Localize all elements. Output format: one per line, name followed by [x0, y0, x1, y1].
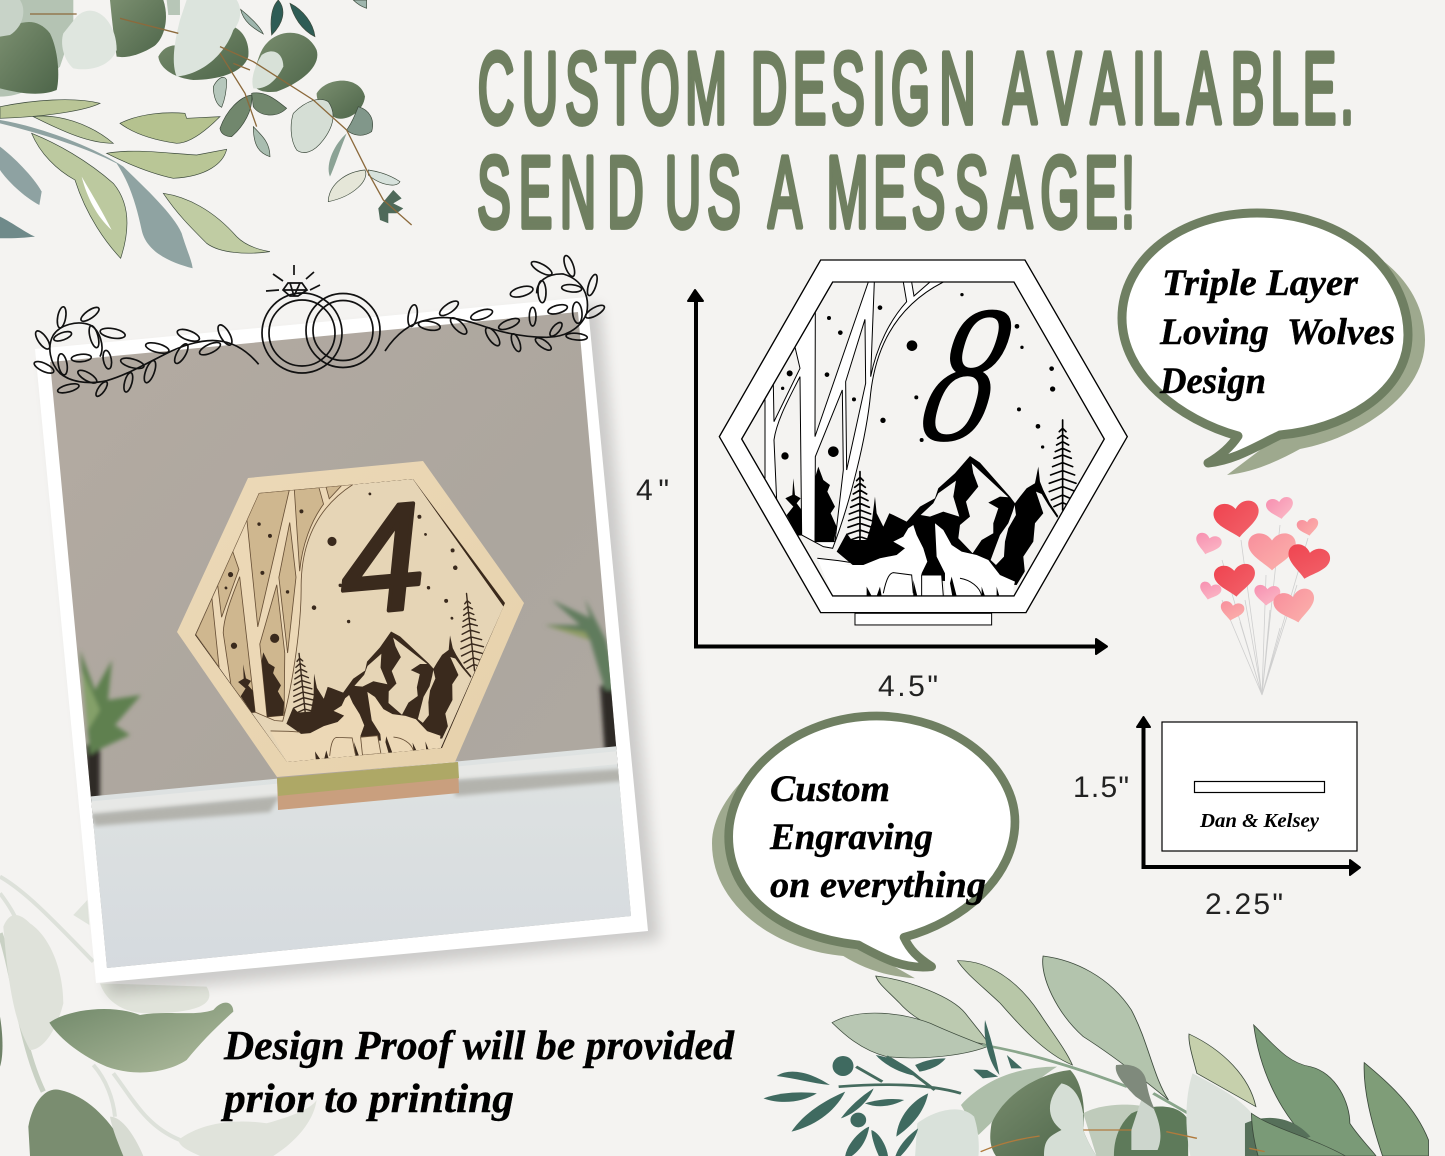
speech bubble: custom engraving: Engraving [769, 817, 933, 858]
rings [262, 293, 380, 373]
dimension axes: hexagon [688, 290, 1107, 654]
dimension label: height 4 inches: 4" [636, 474, 669, 507]
speech bubble: custom engraving [712, 716, 1015, 978]
speech bubble: custom engraving: on everything [770, 865, 986, 906]
dimension label: width 4.5 inches: 4.5" [878, 670, 938, 703]
title: CUSTOM DESIGN AVAILABLE. [478, 32, 1354, 145]
photo drop shadow [45, 305, 660, 995]
vine left [33, 305, 259, 398]
number 8: 8 [904, 266, 1029, 483]
design proof note: Design Proof will be provided [223, 1022, 734, 1068]
foliage: bottom right watercolor branch [763, 956, 1428, 1156]
balloon strings [1222, 525, 1308, 695]
title [477, 32, 1354, 249]
hearts [1193, 496, 1332, 627]
wooden hexagon [177, 461, 524, 777]
speech bubble: triple layer design: Loving Wolves [1159, 312, 1395, 353]
heart balloons bouquet [1193, 496, 1332, 695]
hexagon frame and base [719, 260, 1127, 625]
name plate diagram [1162, 722, 1357, 851]
foliage: bottom left faded leaves [0, 877, 317, 1156]
line-art hexagon diagram [719, 260, 1127, 625]
engraved number 4: 4 [332, 471, 431, 647]
table number base [277, 762, 459, 810]
rings and vine ornament [33, 254, 606, 398]
photo scene [50, 312, 631, 968]
foliage: top left watercolor eucalyptus [0, 0, 412, 268]
table top [91, 746, 631, 968]
speech bubble: triple layer design [1122, 213, 1425, 475]
title: SEND US A MESSAGE! [477, 136, 1135, 249]
speech bubble: triple layer design: Triple Layer [1162, 263, 1359, 304]
design proof note [221, 1022, 734, 1121]
speech bubble: triple layer design: Design [1159, 361, 1266, 402]
photo panel: wooden table number on polaroid [30, 290, 660, 1000]
dimension label: height 1.5 inches: 1.5" [1073, 771, 1129, 804]
dimension label: width 2.25 inches: 2.25" [1205, 888, 1283, 921]
dimension axes: name plate [1137, 717, 1360, 875]
plant left [80, 650, 141, 825]
design proof note: prior to printing [221, 1075, 514, 1121]
plant right [545, 599, 622, 770]
photo white frame [35, 297, 648, 983]
vine right [385, 254, 606, 353]
forest and wolves scene [742, 282, 1104, 596]
hexagon inner outline [742, 282, 1104, 596]
engraved forest scene [182, 472, 518, 769]
speech bubble: custom engraving: Custom [770, 769, 890, 810]
engraved name: Dan & Kelsey [1199, 810, 1319, 832]
diamond and sparkle rays [266, 265, 320, 296]
